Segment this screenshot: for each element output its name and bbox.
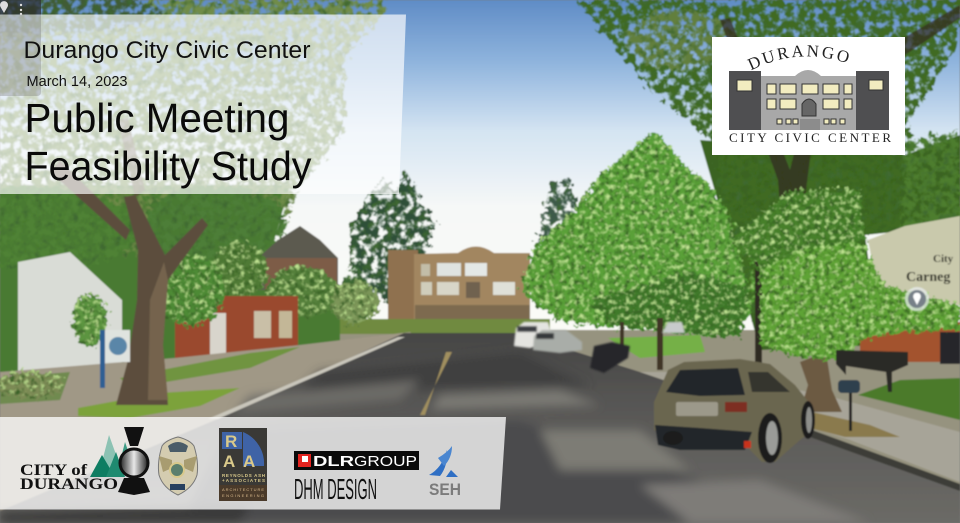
- civic center logo: [712, 37, 905, 155]
- icon: pin and menu dots: [0, 1, 22, 15]
- mid tree trunks: [620, 318, 663, 370]
- logo: Reynolds Ash and Associates: ENGINEERING: [222, 493, 264, 498]
- right sidewalk: [640, 372, 960, 482]
- date: March 14, 2023: [26, 74, 127, 90]
- right tree trunk and branches: [720, 5, 960, 412]
- left lawn: [0, 347, 300, 418]
- left curb: [208, 337, 405, 419]
- logo word: Durango: DURANGO: [746, 45, 849, 70]
- Carnegie building at right: [860, 216, 960, 364]
- heading: Public Meeting: Public Meeting: [24, 95, 290, 141]
- big left tree canopy: [0, 0, 385, 272]
- road shadows and dapple: [0, 352, 870, 523]
- logo: DLR Group: GROUP: [354, 453, 417, 470]
- road surface: [0, 333, 960, 523]
- heading: Durango City Civic Center: Durango City Civic Center: [24, 37, 310, 64]
- left tree trunk and branches: [50, 118, 208, 405]
- left solid foliage underlay: [0, 185, 340, 375]
- logo: SEH: [429, 446, 461, 499]
- logo: Reynolds Ash and Associates: +ASSOCIATES: [222, 478, 265, 483]
- right tree solid foliage underlay: [700, 135, 960, 350]
- parked motorcycle: [590, 342, 630, 373]
- logo: Reynolds Ash and Associates: A: [223, 452, 235, 471]
- map pin marker: [905, 287, 929, 311]
- distant pine trees: [338, 172, 578, 305]
- right tree lower bright foliage: [730, 190, 960, 362]
- logo: Reynolds Ash and Associates: REYNOLDS ASH: [222, 473, 265, 478]
- right lawn: [858, 378, 960, 420]
- lower left foliage and shrubs: [0, 254, 224, 398]
- icon: civic center building: [729, 70, 889, 130]
- logo: DLR Group: DLR: [313, 453, 354, 470]
- planting strip by car: [810, 412, 900, 437]
- logo: Reynolds Ash and Associates: R: [225, 432, 237, 451]
- logo: Reynolds Ash and Associates: A: [243, 452, 255, 471]
- distant parked cars: [514, 322, 685, 353]
- Carnegie building at right: Carneg: [906, 270, 950, 285]
- title panel: [0, 14, 406, 194]
- logo: SEH: SEH: [429, 480, 461, 499]
- logo: DLR Group: [294, 451, 419, 470]
- logo: City of Durango: CITY of: [20, 462, 88, 479]
- logo: Reynolds Ash and Associates: [219, 428, 267, 501]
- logo: Reynolds Ash and Associates: ARCHITECTURE: [222, 487, 264, 492]
- left street sign: [100, 330, 130, 388]
- trees behind red building: [212, 242, 379, 324]
- Carnegie building at right: City: [933, 253, 954, 265]
- logo: City of Durango: DURANGO: [20, 476, 118, 493]
- parked Subaru: [654, 359, 815, 463]
- park bench: [836, 350, 908, 392]
- ground base: [0, 330, 960, 523]
- heading: Feasibility Study: Feasibility Study: [24, 143, 312, 189]
- right large tree foliage: [575, 0, 960, 355]
- parking meter: [838, 380, 860, 431]
- sky: [0, 0, 960, 345]
- logo: police badge: [158, 437, 198, 495]
- partner logos panel: [0, 417, 506, 510]
- right curb: [810, 430, 960, 491]
- white house at left: [18, 252, 122, 375]
- logo: City of Durango: [20, 427, 150, 495]
- logo words: City Civic Center: CITY CIVIC CENTER: [729, 130, 891, 145]
- mid-street green trees: [520, 130, 760, 338]
- partner logos panel: DHM DESIGN: [294, 474, 377, 506]
- ground and sidewalk left: [0, 332, 420, 523]
- grey-roof house: [258, 226, 338, 290]
- centre road line: [420, 352, 452, 415]
- distant lawn: [608, 335, 705, 358]
- red brick building: [175, 296, 298, 360]
- street view top control strip: [0, 0, 41, 15]
- civic center building in distance: [340, 246, 550, 334]
